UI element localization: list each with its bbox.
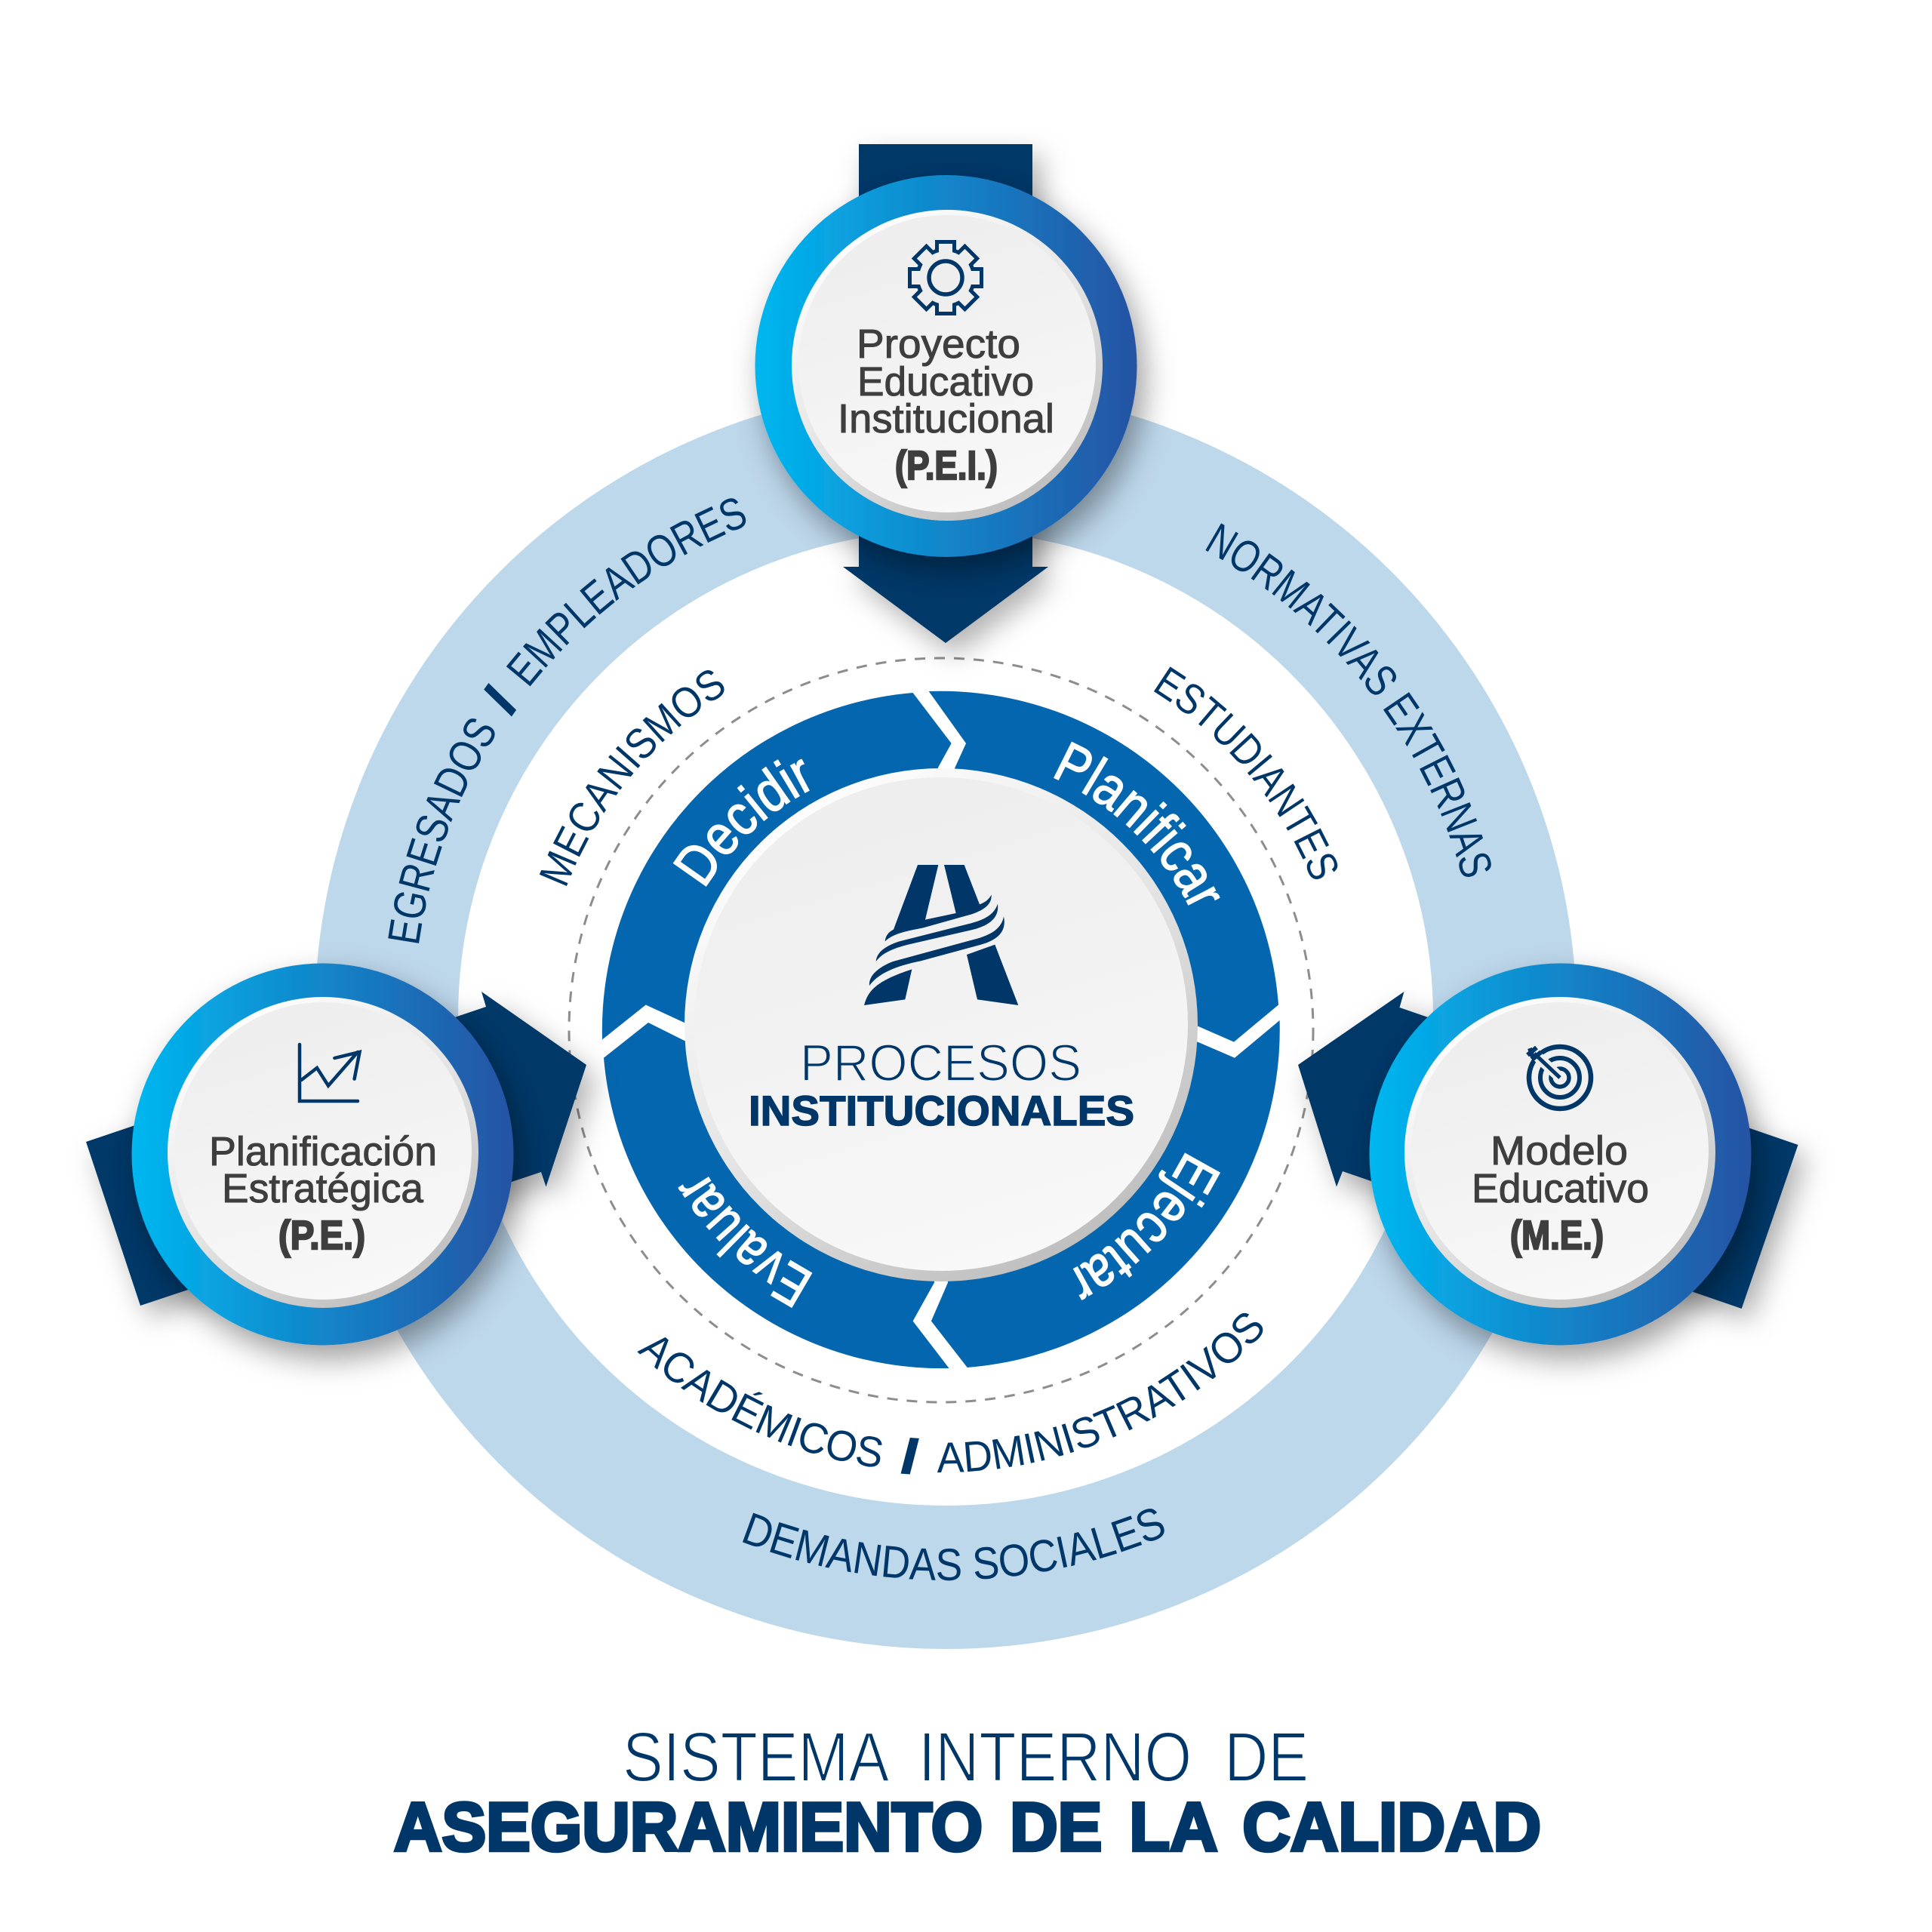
- segment: Ejecutar: [931, 1020, 1280, 1367]
- title: [394, 1718, 1541, 1866]
- node text: (P.E.I.): [895, 443, 998, 488]
- title: ASEGURAMIENTO DE LA CALIDAD: [394, 1789, 1541, 1866]
- inner label: estudiantes: ESTUDIANTES: [1154, 666, 1337, 880]
- node text: [209, 1129, 437, 1258]
- arrow: left, pointing to center: [86, 992, 586, 1306]
- band label: normativas externas: NORMATIVAS EXTERNAS: [1205, 523, 1491, 877]
- segment: Evaluar: [604, 1023, 949, 1368]
- arrow: right, pointing to center: [1298, 992, 1798, 1309]
- central disc: [685, 768, 1198, 1281]
- node text: (M.E.): [1510, 1213, 1604, 1258]
- process cycle ring: [602, 691, 1280, 1368]
- band label: demandas sociales: DEMANDAS SOCIALES: [743, 1509, 1164, 1580]
- outer light-blue ring band: [386, 459, 1505, 1577]
- label: Ejecutar: Ejecutar: [1073, 1152, 1220, 1300]
- dashed circle around process ring: [569, 658, 1313, 1402]
- node text: Modelo: [1491, 1128, 1628, 1174]
- title: SISTEMA INTERNO DE: [623, 1718, 1309, 1796]
- label: Evaluar: Evaluar: [678, 1177, 812, 1309]
- center heading: procesos institucionales: PROCESOS: [800, 1034, 1081, 1092]
- icon: gear: [912, 244, 980, 312]
- node text: [1472, 1128, 1649, 1258]
- band label: egresados / empleadores: EGRESADOS / EMPLEADORES: [388, 498, 746, 943]
- inner label: académicos / administrativos: ACADÉMICOS / ADMINISTRATIVOS: [637, 1313, 1263, 1475]
- label: Decidir: Decidir: [673, 759, 810, 887]
- node text: Planificación: [209, 1129, 437, 1174]
- node text: Educativo: [857, 359, 1034, 405]
- center heading: procesos institucionales: [749, 1034, 1134, 1134]
- node: Planificación Estratégica: [131, 963, 513, 1345]
- node text: Educativo: [1472, 1166, 1649, 1211]
- logo: stylised A: [864, 865, 1018, 1005]
- arrow: top, pointing down: [843, 144, 1048, 643]
- inner label: mecanismos: MECANISMOS: [539, 670, 724, 886]
- icon: growth chart: [300, 1044, 359, 1101]
- icon: target: [1527, 1047, 1591, 1109]
- node text: Estratégica: [222, 1166, 424, 1211]
- node: Modelo Educativo: [1369, 963, 1751, 1345]
- node: Proyecto Educativo Institucional: [755, 175, 1137, 557]
- node text: [838, 321, 1054, 488]
- node text: (P.E.): [278, 1213, 365, 1258]
- center heading: procesos institucionales: INSTITUCIONALES: [749, 1087, 1134, 1134]
- node text: Institucional: [838, 396, 1054, 441]
- segment: Decidir: [602, 693, 952, 1040]
- segment: Planificar: [929, 691, 1278, 1042]
- node text: Proyecto: [857, 321, 1020, 367]
- label: Planificar: Planificar: [1054, 741, 1220, 906]
